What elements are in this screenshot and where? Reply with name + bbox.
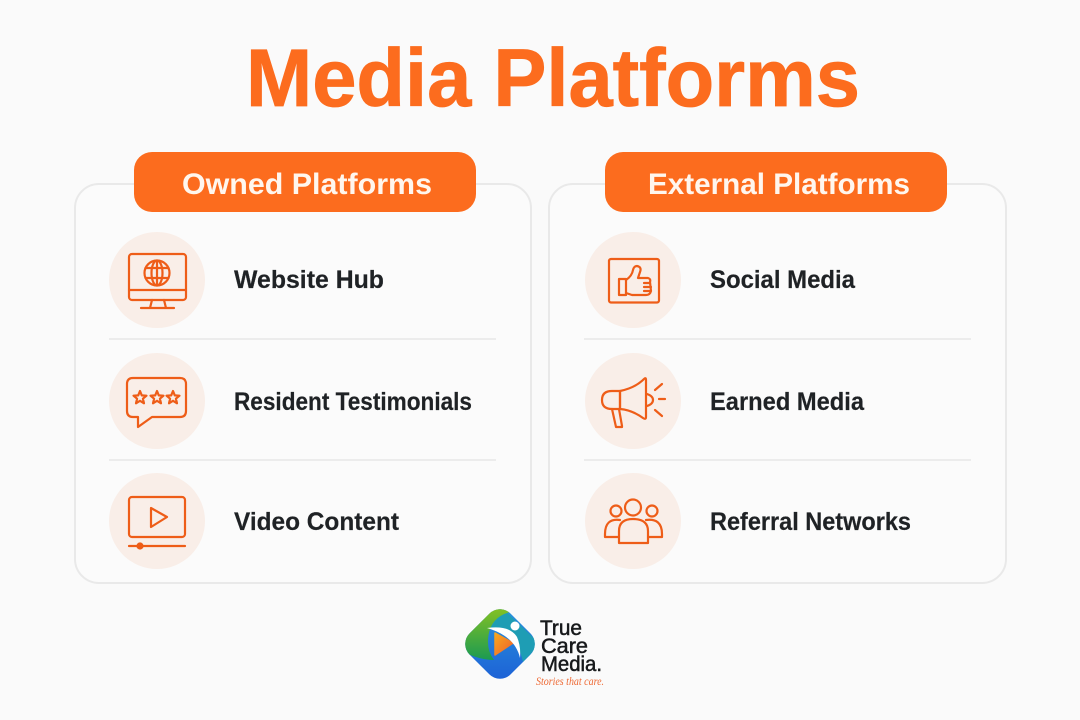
row: video content	[109, 473, 400, 569]
label: social media: Social Media	[710, 266, 856, 294]
label: video content: Video Content	[234, 508, 400, 536]
logo tagline: Stories that care.	[536, 674, 604, 688]
icon: speech bubble with stars	[127, 378, 186, 427]
icon: thumbs up	[609, 259, 659, 302]
heading: external platforms: External Platforms	[648, 168, 910, 201]
title: Media Platforms	[246, 33, 860, 124]
heading: owned platforms: Owned Platforms	[182, 168, 432, 201]
panel: external platforms	[549, 152, 1006, 583]
icon: megaphone	[602, 378, 665, 427]
label: referral networks: Referral Networks	[710, 508, 911, 536]
logo wordmark	[540, 617, 602, 676]
logo wordmark: True	[540, 617, 582, 640]
row: referral networks	[585, 473, 911, 569]
row: website hub	[109, 232, 384, 328]
row: earned media	[585, 353, 865, 449]
icon: logo mark	[465, 609, 535, 679]
label: resident testimonials: Resident Testimonials	[234, 388, 472, 416]
row: social media	[585, 232, 856, 328]
icon: video player	[129, 497, 185, 548]
label: earned media: Earned Media	[710, 388, 865, 416]
logo: True Care Media	[465, 609, 604, 685]
logo wordmark: Media.	[541, 653, 602, 676]
logo wordmark: Care	[541, 635, 588, 658]
label: website hub: Website Hub	[234, 266, 384, 294]
heading: owned platforms	[134, 152, 476, 212]
heading: external platforms	[605, 152, 947, 212]
panel: owned platforms	[75, 152, 531, 583]
icon: desktop globe	[129, 254, 186, 308]
row: resident testimonials	[109, 353, 472, 449]
icon: group of people	[605, 500, 662, 543]
